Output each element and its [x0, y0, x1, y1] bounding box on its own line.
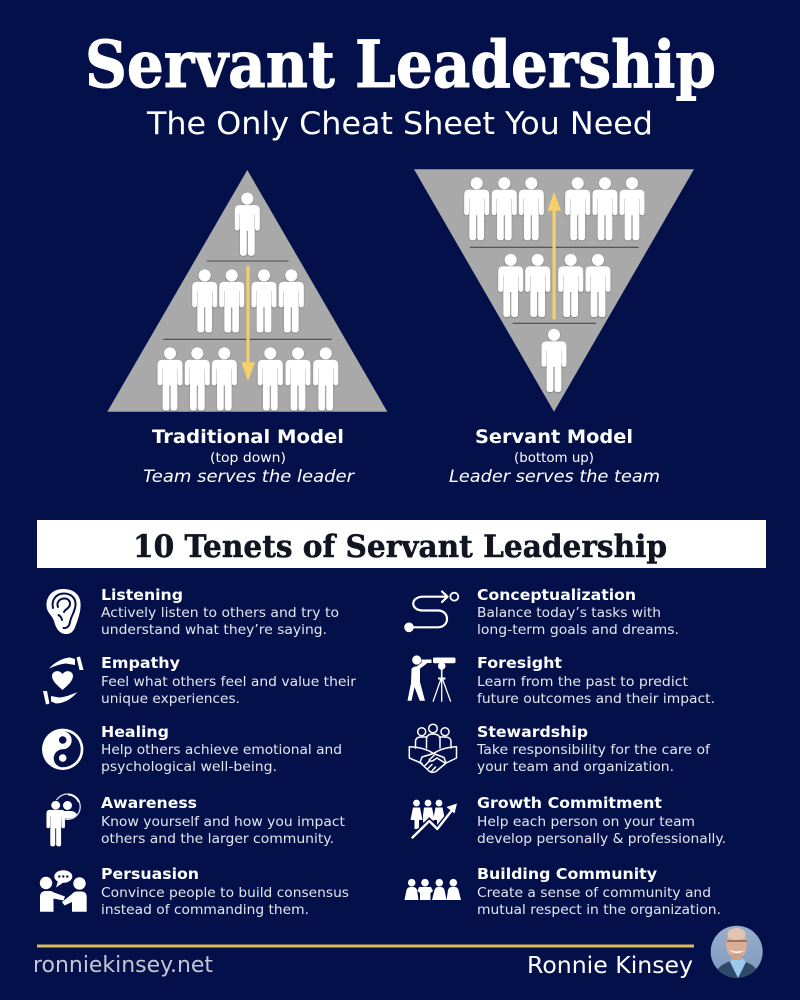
- description: Learn from the past to predict: [477, 674, 688, 690]
- caption: traditional model: Traditional Model: [152, 426, 344, 448]
- description: Balance today’s tasks with: [477, 605, 661, 621]
- icon: person with telescope: [408, 655, 456, 702]
- subtitle: The Only Cheat Sheet You Need: [146, 106, 653, 142]
- description: Help others achieve emotional and: [101, 742, 342, 758]
- heading: Stewardship: [477, 723, 588, 741]
- caption: traditional model: Team serves the leader: [143, 467, 355, 487]
- icon: yin yang: [42, 729, 83, 770]
- tenet: persuasion: [40, 865, 349, 918]
- description: Convince people to build consensus: [101, 885, 349, 901]
- description: Know yourself and how you impact: [101, 814, 345, 830]
- description: others and the larger community.: [101, 831, 334, 847]
- heading: Awareness: [101, 794, 197, 812]
- icon: team and handshake: [409, 724, 456, 772]
- tenet: foresight: [408, 654, 715, 707]
- heading: Persuasion: [101, 865, 199, 883]
- author photo: [710, 925, 764, 979]
- section banner: [37, 520, 766, 568]
- arrow: upward: [548, 192, 561, 319]
- heading: Foresight: [477, 654, 562, 672]
- tenet: awareness: [46, 794, 345, 847]
- heading: Empathy: [101, 654, 180, 672]
- heading: Building Community: [477, 865, 657, 883]
- section heading: 10 Tenets of Servant Leadership: [133, 529, 667, 565]
- description: future outcomes and their impact.: [477, 691, 715, 707]
- description: Help each person on your team: [477, 814, 695, 830]
- footer author name: Ronnie Kinsey: [527, 953, 693, 979]
- diagram: traditional model pyramid: [107, 170, 387, 412]
- tenet: building community: [404, 865, 721, 918]
- tenet: growth commitment: [410, 794, 726, 847]
- heading: Healing: [101, 723, 169, 741]
- caption: servant model: Leader serves the team: [449, 467, 660, 487]
- arrow: downward: [242, 266, 255, 381]
- icon: ear: [46, 589, 81, 634]
- footer rule: [37, 944, 694, 948]
- description: Take responsibility for the care of: [476, 742, 711, 758]
- heading: Growth Commitment: [477, 794, 662, 812]
- description: psychological well-being.: [101, 759, 277, 775]
- description: Feel what others feel and value their: [101, 674, 356, 690]
- caption: servant model: Servant Model: [475, 426, 633, 448]
- tenet: listening: [46, 586, 339, 638]
- diagram: servant model pyramid: [414, 169, 694, 412]
- footer website: ronniekinsey.net: [33, 953, 213, 978]
- description: instead of commanding them.: [101, 902, 309, 918]
- icon: four people: [404, 879, 461, 900]
- tenet: stewardship: [409, 723, 711, 775]
- description: develop personally & professionally.: [477, 831, 726, 847]
- icon: team and rising arrow: [410, 800, 457, 838]
- title: Servant Leadership: [85, 27, 716, 103]
- description: mutual respect in the organization.: [477, 902, 721, 918]
- icon: person with mirror: [46, 794, 80, 846]
- heading: Conceptualization: [477, 586, 636, 604]
- icon: winding path: [404, 592, 458, 632]
- tenet: empathy: [43, 654, 356, 707]
- caption: traditional model: (top down): [210, 451, 286, 466]
- description: long-term goals and dreams.: [477, 622, 679, 638]
- caption: servant model: (bottom up): [514, 451, 594, 466]
- heading: Listening: [101, 586, 183, 604]
- icon: two people talking: [40, 870, 87, 912]
- tenet: healing: [42, 723, 342, 775]
- caption: servant model: [449, 426, 660, 487]
- description: understand what they’re saying.: [101, 622, 327, 638]
- description: Actively listen to others and try to: [101, 605, 339, 621]
- description: unique experiences.: [101, 691, 240, 707]
- description: Create a sense of community and: [477, 885, 711, 901]
- description: your team and organization.: [477, 759, 674, 775]
- icon: hands and heart: [43, 656, 84, 704]
- tenet: conceptualization: [404, 586, 679, 638]
- caption: traditional model: [143, 426, 355, 487]
